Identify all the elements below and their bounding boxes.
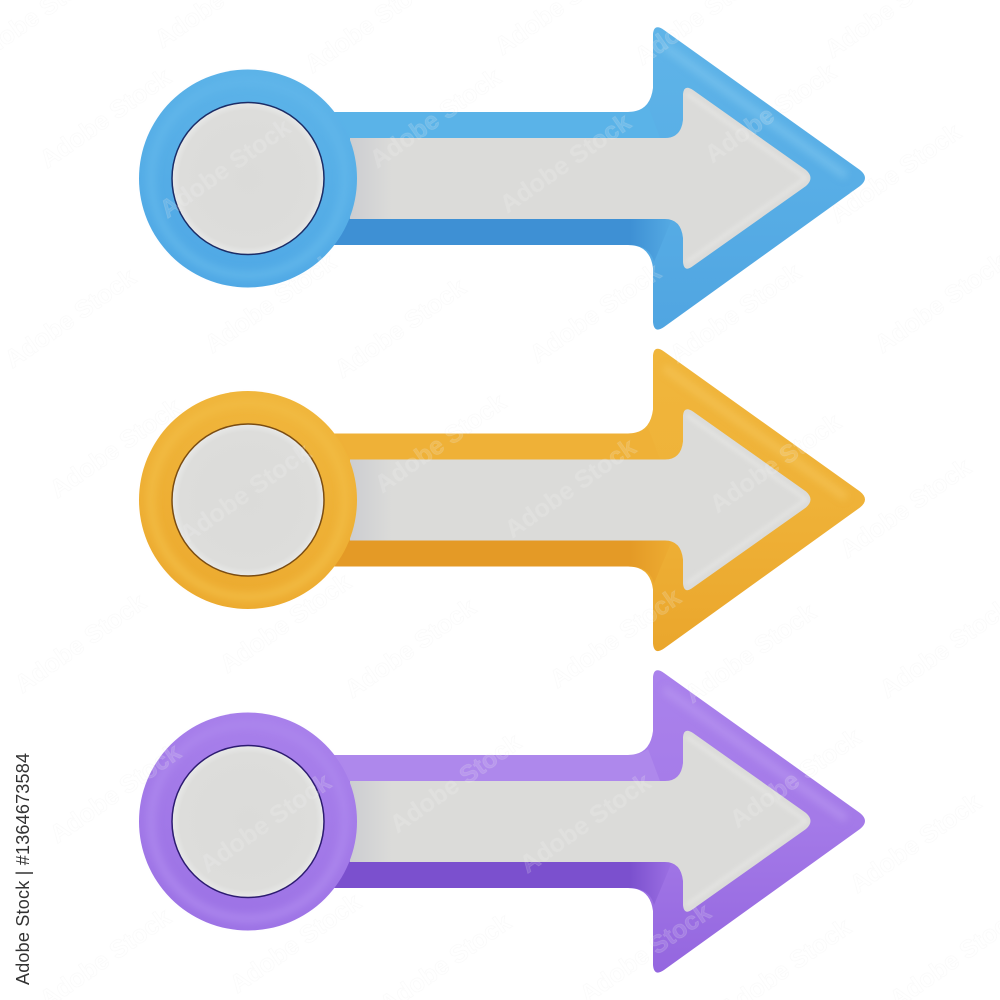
watermark pattern: Adobe Stock [45, 393, 186, 504]
orange upper band [320, 428, 660, 460]
watermark pattern: Adobe Stock [835, 453, 976, 564]
watermark pattern: Adobe Stock [500, 433, 641, 544]
arrow: orange [139, 349, 865, 651]
watermark pattern: Adobe Stock [195, 768, 336, 879]
arrow: purple [139, 670, 865, 973]
stock id caption: Adobe Stock | #1364673584 [13, 753, 33, 985]
orange grey disc [172, 424, 324, 576]
purple lower band [320, 862, 672, 905]
watermark pattern: Adobe Stock [385, 728, 526, 839]
watermark pattern: Adobe Stock [35, 63, 176, 174]
blue upper band [320, 106, 660, 138]
blue ring [139, 70, 357, 288]
orange edge highlight [664, 368, 846, 498]
watermark pattern: Adobe Stock [725, 723, 866, 834]
watermark pattern: Adobe Stock [175, 438, 316, 549]
orange ring bevel [151, 403, 345, 597]
watermark pattern: Adobe Stock [845, 788, 986, 899]
watermark pattern: Adobe Stock [370, 388, 511, 499]
watermark pattern: Adobe Stock [700, 58, 841, 169]
watermark pattern: Adobe Stock [545, 583, 686, 694]
purple ring [139, 712, 357, 930]
watermark pattern: Adobe Stock [10, 588, 151, 699]
watermark pattern: Adobe Stock [365, 63, 506, 174]
watermark pattern: Adobe Stock [680, 598, 821, 709]
blue grey inner arrow [350, 88, 810, 269]
purple arrow body [320, 670, 865, 973]
watermark pattern: Adobe Stock [225, 888, 366, 999]
orange arrow body [320, 349, 865, 651]
watermark pattern: Adobe Stock [495, 108, 636, 219]
purple grey inner arrow [350, 731, 810, 912]
purple upper band [320, 749, 660, 781]
watermark pattern: Adobe Stock [515, 768, 656, 879]
blue edge highlight [664, 46, 846, 176]
watermark pattern: Adobe Stock [215, 568, 356, 679]
watermark pattern: Adobe Stock [200, 248, 341, 359]
orange ring [139, 391, 357, 609]
watermark pattern: Adobe Stock [340, 593, 481, 704]
orange grey arrow bevel [350, 416, 806, 584]
purple grey arrow bevel [140, 712, 334, 930]
blue arrow body [320, 27, 865, 330]
watermark pattern: Adobe Stock [155, 113, 296, 224]
watermark pattern: Adobe Stock [330, 273, 471, 384]
watermark pattern: Adobe Stock [825, 118, 966, 229]
blue grey arrow bevel [350, 94, 806, 262]
blue lower band [320, 219, 672, 262]
blue grey disc [172, 102, 324, 254]
watermark pattern: Adobe Stock [0, 263, 141, 374]
orange lower band [320, 540, 672, 584]
watermark pattern: Adobe Stock [705, 408, 846, 519]
watermark pattern: Adobe Stock [665, 258, 806, 369]
orange grey inner arrow [350, 409, 810, 590]
purple grey disc [172, 746, 324, 898]
watermark pattern: Adobe Stock [45, 738, 186, 849]
purple edge highlight [664, 689, 846, 819]
blue ring bevel [151, 82, 345, 276]
arrow: blue [139, 27, 865, 330]
purple ring bevel [151, 724, 345, 918]
watermark pattern: Adobe Stock [525, 258, 666, 369]
